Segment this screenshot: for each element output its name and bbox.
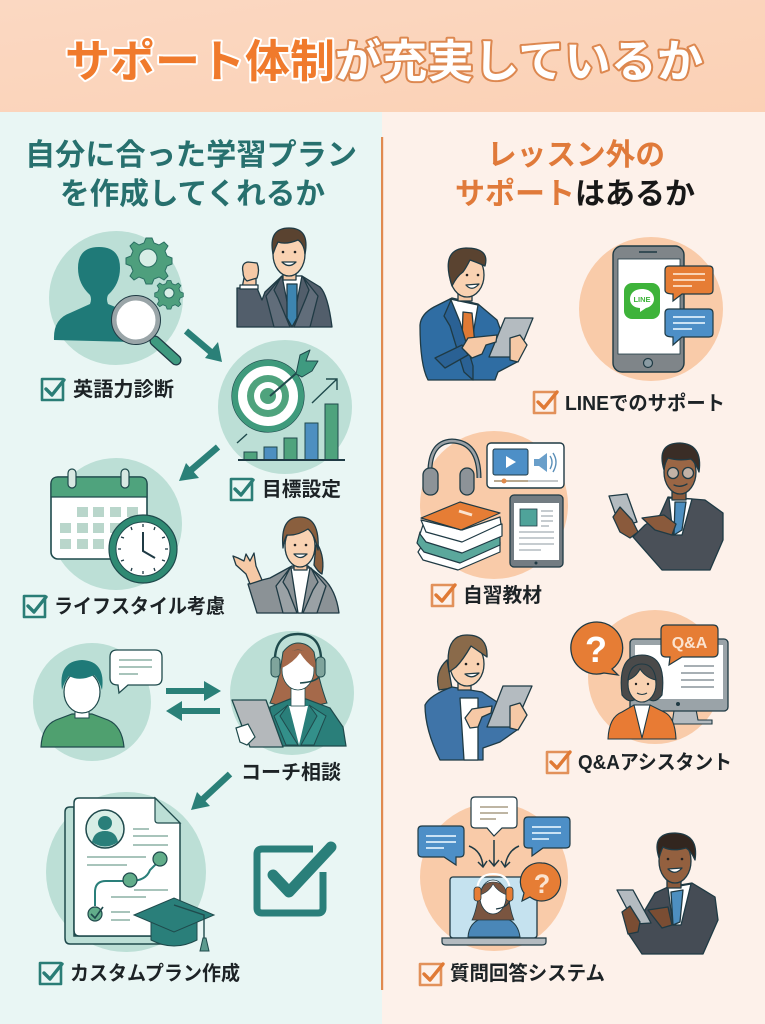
header band: [0, 0, 765, 112]
person: woman with tablet: [425, 635, 532, 760]
label: custom plan: カスタムプラン作成: [70, 961, 240, 985]
icon: self-study materials: [417, 431, 568, 579]
person: assistant: [608, 655, 676, 739]
title: が充実しているか: [335, 36, 703, 87]
icon: question answering system: [418, 797, 570, 951]
person: man with tablet, dark suit: [617, 833, 718, 954]
person: man with glasses and phone: [609, 443, 723, 570]
title: サポート体制: [65, 36, 335, 87]
heading: personal study plan: 自分に合った学習プラン: [25, 139, 357, 172]
icon: profile diagnosis: [49, 231, 183, 365]
label: lifestyle: ライフスタイル考慮: [54, 595, 225, 618]
icon: question bubble: ?: [585, 629, 607, 670]
heading: support outside lessons: サポート: [455, 178, 575, 211]
arrow: to custom plan: [191, 774, 230, 810]
icon: video panel: [487, 443, 564, 488]
label: goal setting: 目標設定: [262, 478, 341, 501]
title: [65, 36, 703, 87]
icon: tablet: [510, 495, 563, 567]
heading: personal study plan: [25, 139, 357, 211]
heading: support outside lessons: レッスン外の: [487, 139, 665, 172]
icon: LINE logo: [624, 283, 660, 319]
icon: target and growth chart: [218, 340, 352, 474]
label: question answering system: 質問回答システム: [450, 961, 605, 985]
person: man with tablet, orange tie: [420, 248, 533, 380]
person: woman gesturing: [233, 517, 339, 613]
arrows: two-way consultation: [166, 681, 221, 721]
arrow: to lifestyle: [179, 447, 218, 481]
arrow: to goal setting: [186, 331, 222, 362]
icon: big check mark: [257, 847, 331, 913]
icon: LINE logo: LINE: [633, 295, 651, 304]
icon: question bubble: ?: [534, 869, 550, 899]
heading: personal study plan: を作成してくれるか: [60, 178, 325, 211]
panel: personal study plan: [0, 112, 382, 1024]
icon: Q&A assistant: Q&A: [672, 635, 708, 652]
icon: laptop with agent: [442, 874, 546, 945]
icon: monitor: [630, 639, 728, 724]
icon: phone with LINE app: [579, 237, 723, 381]
label: English diagnosis: 英語力診断: [73, 378, 174, 401]
label: self-study materials: 自習教材: [463, 584, 542, 607]
icon: learner with speech bubble: [33, 643, 162, 761]
icon: question bubble: [520, 863, 561, 901]
icon: question bubble: [571, 622, 623, 675]
label: goal setting: [231, 478, 341, 501]
person: man with raised fist: [237, 228, 332, 327]
icon: custom plan document and cap: [46, 792, 214, 952]
panel: support outside lessons: [383, 112, 765, 1024]
icon: Q&A assistant: [571, 610, 728, 744]
label: Q&A assistant: Q&Aアシスタント: [578, 751, 732, 774]
divider: [381, 137, 383, 990]
icon: coach with headset and tablet: [230, 631, 354, 755]
label: coach consultation: コーチ相談: [241, 761, 341, 784]
label: LINE support: LINEでのサポート: [565, 392, 725, 415]
icon: headphones: [423, 441, 479, 495]
label: self-study materials: [432, 584, 542, 607]
icon: calendar and clock: [50, 458, 182, 590]
heading: support outside lessons: はあるか: [575, 178, 695, 211]
icon: stack of books: [417, 502, 502, 570]
heading: support outside lessons: [455, 139, 695, 211]
